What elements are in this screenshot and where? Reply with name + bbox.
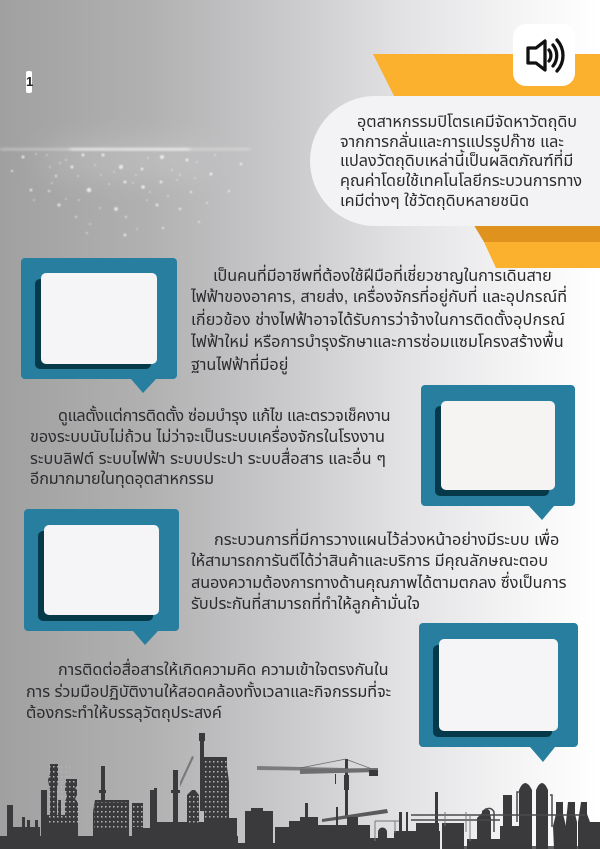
text block 4 — [26, 658, 391, 722]
icon: speaker — [513, 24, 575, 86]
intro paragraph: เคมีต่างๆ ใช้วัตถุดิบหลายชนิด — [340, 192, 529, 210]
panel: callout 4 — [419, 623, 578, 762]
text block 1: ไฟฟ้าใหม่ หรือการบำรุงรักษาและการซ่อมแซมโครงสร้างพื้น — [191, 333, 564, 351]
text block 4: การ ร่วมมือปฏิบัติงานให้สอดคล้องทั้งเวลาและกิจกรรมที่จะ — [26, 683, 391, 701]
text block 1: เกี่ยวข้อง ช่างไฟฟ้าอาจได้รับการว่าจ้างในการติดตั้งอุปกรณ์ — [191, 311, 565, 329]
panel: callout 1 — [21, 258, 177, 393]
intro paragraph: แปลงวัตถุดิบเหล่านี้เป็นผลิตภัณฑ์ที่มี — [340, 152, 573, 170]
intro paragraph: อุตสาหกรรมปิโตรเคมีจัดหาวัตถุดิบ — [357, 113, 577, 131]
text block 1: ฐานไฟฟ้าที่มีอยู่ — [191, 356, 288, 374]
panel: callout 3 — [24, 509, 179, 645]
text block 1: เป็นคนที่มีอาชีพที่ต้องใช้ฝีมือที่เชี่ยวชาญในการเดินสาย — [213, 267, 552, 285]
panel: callout 2 — [421, 385, 575, 520]
text block 2: ดูแลตั้งแต่การติดตั้ง ซ่อมบำรุง แก้ไข และตรวจเช็คงาน — [58, 407, 390, 425]
intro paragraph: คุณค่าโดยใช้เทคโนโลยีกระบวนการทาง — [340, 172, 582, 190]
text block 4: ต้องกระทำให้บรรลุวัตถุประสงค์ — [26, 704, 222, 722]
panel: intro banner — [310, 24, 600, 268]
text block 3: กระบวนการที่มีการวางแผนไว้ล่วงหน้าอย่างมีระบบ เพื่อ — [214, 531, 559, 549]
text block 3: ให้สามารถการันตีได้ว่าสินค้าและบริการ มีคุณลักษณะตอบ — [191, 552, 548, 570]
text block 2: อีกมากมายในทุดอุตสาหกรรม — [30, 470, 214, 488]
text block 2: ของระบบนับไม่ถ้วน ไม่ว่าจะเป็นระบบเครื่องจักรในโรงงาน — [30, 428, 385, 446]
text block 1: ไฟฟ้าของอาคาร, สายส่ง, เครื่องจักรที่อยู่กับที่ และอุปกรณ์ที่ — [191, 288, 567, 306]
intro text bubble — [310, 96, 600, 226]
text block 3: สนองความต้องการทางด้านคุณภาพได้ตามตกลง ซึ่งเป็นการ — [191, 574, 566, 592]
page marker — [26, 71, 32, 93]
text block 4: การติดต่อสื่อสารให้เกิดความคิด ความเข้าใจตรงกันใน — [58, 661, 388, 679]
text block 2: ระบบลิฟต์ ระบบไฟฟ้า ระบบประปา ระบบสื่อสาร และอื่น ๆ — [30, 450, 386, 468]
text block 2 — [30, 406, 390, 488]
text block 3 — [191, 528, 566, 614]
page marker: 1 — [26, 74, 33, 89]
text block 1 — [190, 264, 567, 374]
intro paragraph: จากการกลั่นและการแปรรูปก๊าซ และ — [340, 133, 564, 151]
text block 3: รับประกันที่สามารถที่ทำให้ลูกค้ามั่นใจ — [191, 595, 420, 613]
yellow ribbon shapes — [373, 54, 600, 268]
intro paragraph — [340, 113, 582, 210]
